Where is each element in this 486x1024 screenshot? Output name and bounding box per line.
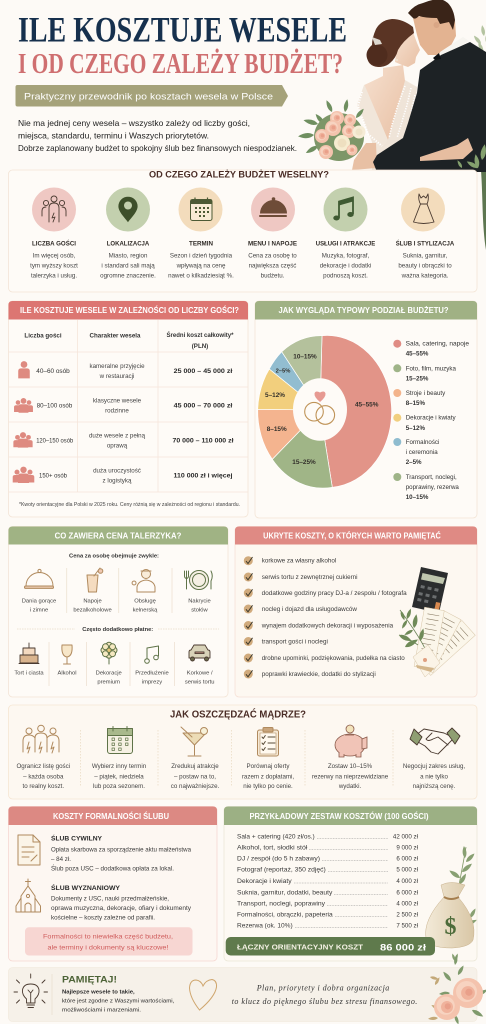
checklist: transport gości i noclegi — [262, 638, 328, 646]
chart value labels: 5–12% — [265, 392, 285, 399]
row: 120–150: 120–150 osób — [36, 438, 74, 445]
icon: heart outline — [190, 980, 217, 1010]
labels row 2: serwis tortu — [185, 680, 215, 686]
chart value labels: 8–15% — [267, 426, 287, 433]
civil ceremony text — [51, 834, 192, 872]
row: 150+ — [13, 467, 233, 485]
cost list: 6 000 zł — [396, 856, 419, 863]
cost list: Suknia, garnitur, dodatki, beauty — [237, 889, 333, 896]
header — [224, 806, 477, 825]
heading: od czego zależy: OD CZEGO ZALEŻY BUDŻET WESELNY? — [149, 170, 329, 180]
row: 150+: 110 000 zł i więcej — [174, 473, 233, 480]
callout — [25, 927, 192, 956]
labels row 1 — [22, 599, 211, 614]
header — [8, 526, 228, 544]
icon: calendar — [108, 726, 132, 754]
heading: PRZYKŁADOWY ZESTAW KOSZTÓW (100 GOŚCI) — [250, 812, 429, 821]
cost list: Dekoracje i kwiaty — [237, 878, 293, 885]
icon: clipboard — [258, 728, 278, 756]
cost list: Sala + catering (420 zł/os.) — [237, 833, 315, 840]
bouquet — [298, 99, 365, 155]
labels row 2: Korkowe / — [187, 671, 213, 677]
cost list: 5 000 zł — [396, 867, 419, 874]
labels row 2: imprezy — [142, 680, 162, 686]
labels row 2: Dekoracje — [96, 671, 122, 677]
labels row 1: i zimne — [30, 608, 48, 614]
closing quote — [232, 984, 417, 1006]
items labels: LICZBA GOŚCI — [32, 238, 76, 248]
legend — [393, 340, 470, 501]
items descriptions: tym wyższy koszt — [30, 263, 78, 270]
callout: ale terminy i dokumenty są kluczowe! — [48, 945, 169, 952]
cost list: 4 000 zł — [396, 878, 419, 885]
items labels: LOKALIZACJA — [107, 240, 150, 248]
religious ceremony text: Dokumenty z USC, nauki przedmałżeńskie, — [51, 896, 169, 903]
closing quote: Plan, priorytety i dobra organizacja — [256, 984, 389, 993]
items descriptions: wpływają na cenę — [176, 263, 226, 270]
tips text: Ogranicz listę gości — [16, 763, 70, 770]
panel: od czego zależy budżet — [8, 170, 477, 292]
groom neck and face — [413, 14, 456, 55]
cost list: Alkohol, tort, słodki stół — [237, 844, 308, 851]
religious ceremony text — [51, 883, 192, 921]
labels row 2: Tort i ciasta — [14, 671, 44, 677]
legend: poprawiny, rezerwa — [406, 484, 459, 491]
row: 120–150: duże wesele z pełną — [89, 433, 146, 440]
tips text: nie tylko po cenie. — [243, 783, 293, 790]
panel: budget split — [255, 301, 477, 518]
legend: 5–12% — [406, 425, 425, 432]
chart value labels: 45–55% — [355, 402, 379, 409]
remember text: PAMIĘTAJ! — [62, 975, 117, 986]
remember text: Najlepsze wesele to takie, — [62, 989, 135, 995]
tips text: najniższą cenę. — [413, 783, 456, 790]
cost list: 6 000 zł — [396, 889, 419, 896]
items descriptions: ogromne znaczenie. — [100, 273, 156, 280]
items labels — [32, 238, 455, 248]
icon: waiter — [132, 570, 155, 592]
row: 120–150 — [13, 432, 234, 450]
labels row 2: premium — [97, 680, 120, 686]
table column heads: (PLN) — [192, 343, 208, 350]
checklist: nocleg i dojazd dla usługodawców — [262, 606, 357, 613]
legend: Transport, noclegi, — [406, 474, 457, 481]
legend: i ceremonia — [406, 449, 438, 456]
row: 120–150: oprawą — [107, 443, 128, 450]
checklist: poprawki krawieckie, dodatki do stylizacji — [262, 671, 376, 678]
icon: heart and rings — [305, 391, 335, 424]
collar — [440, 37, 469, 56]
icon: guests — [32, 188, 76, 232]
icon: drink — [87, 568, 103, 592]
labels row 1: Nakrycie — [188, 599, 211, 605]
table column heads: Średni koszt całkowity* — [166, 332, 234, 339]
heading: CO ZAWIERA CENA TALERZYKA? — [55, 531, 182, 540]
icon: notes — [145, 646, 158, 663]
bride hair — [367, 19, 414, 67]
intro text — [18, 118, 297, 153]
cost list: DJ / zespół (do 5 h zabawy) — [237, 856, 320, 863]
labels row 1: kelnerską — [133, 608, 158, 614]
icon: cocktail — [181, 727, 208, 756]
row: 80–100: 80–100 osób — [37, 403, 73, 410]
cost list: 42 000 zł — [393, 833, 419, 840]
legend: Stroje i beauty — [406, 390, 446, 397]
bride face — [395, 32, 420, 67]
items descriptions: beauty i obrączki to — [398, 263, 452, 270]
heading: budget split: JAK WYGLĄDA TYPOWY PODZIAŁ BUDŻETU? — [278, 306, 449, 315]
dress lower — [357, 77, 420, 172]
closing quote: to klucz do pięknego ślubu bez stresu finansowego. — [232, 997, 417, 1006]
tips text: wydatki. — [338, 783, 361, 790]
civil ceremony text: Opłata skarbowa za sporządzenie aktu małżeństwa — [51, 846, 192, 853]
religious ceremony text: kościelne – koszty zależne od parafii. — [51, 914, 155, 921]
labels row 2 — [14, 671, 215, 686]
cost list: Fotograf (reportaż, 350 zdjęć) — [237, 867, 326, 874]
cost list: 2 500 zł — [396, 912, 419, 919]
panel: how to save — [8, 705, 477, 799]
heading: KOSZTY FORMALNOŚCI ŚLUBU — [53, 812, 169, 821]
chart value labels: 2–5% — [276, 369, 290, 375]
tips text: a nie tylko — [420, 773, 448, 780]
row: 150+: duża uroczystość — [93, 468, 141, 475]
icon: flower — [101, 642, 117, 664]
row: 40–60: 25 000 – 45 000 zł — [174, 368, 232, 375]
items descriptions: Suknia, garnitur, — [403, 253, 448, 260]
tips text: lub poza sezonem. — [93, 783, 145, 790]
photo: wedding couple with bouquet — [298, 0, 486, 250]
cost list — [237, 833, 419, 930]
icon: tableware — [184, 570, 212, 590]
religious ceremony text: oprawa muzyczna, dekoracje, ofiary i dokumenty — [51, 905, 192, 912]
checklist: korkowe za własny alkohol — [262, 558, 336, 565]
table column heads — [24, 332, 234, 350]
items labels: ŚLUB I STYLIZACJA — [396, 238, 455, 248]
items descriptions — [30, 253, 452, 280]
legend: 2–5% — [406, 459, 422, 466]
items descriptions: ważna kategoria. — [401, 273, 449, 280]
items descriptions: nawet o kilkadziesiąt %. — [168, 273, 234, 280]
intro text: Dobrze zaplanowany budżet to spokojny ślub bez finansowych niespodzianek. — [18, 143, 297, 153]
row: 120–150: 70 000 – 110 000 zł — [172, 438, 234, 445]
illustration: money bag with leaves — [426, 846, 478, 961]
row: 40–60: w restauracji — [99, 373, 134, 380]
items descriptions: Im więcej osób, — [33, 253, 76, 260]
heading: JAK OSZCZĘDZAĆ MĄDRZE? — [170, 708, 306, 720]
panel: sample cost set — [224, 806, 478, 961]
bride forearm — [420, 138, 473, 161]
tips text: Zredukuj atrakcje — [171, 763, 219, 770]
tips text: – postaw na to, — [174, 773, 216, 780]
groom hair — [408, 0, 455, 30]
bride arm and hand — [352, 143, 377, 170]
legend: Sala, catering, napoje — [406, 341, 470, 348]
items descriptions: Sezon i dzień tygodnia — [170, 253, 233, 260]
panel: cost table — [8, 301, 248, 517]
cost list: Rezerwa (ok. 10%) — [237, 923, 293, 930]
cost list: 7 500 zł — [396, 923, 419, 930]
tips text: rezerwy na nieprzewidziane — [312, 773, 389, 780]
items descriptions: talerzyka i usług. — [31, 273, 77, 280]
icon: calendar — [178, 188, 222, 232]
cost list: 4 000 zł — [396, 900, 419, 907]
row: 40–60: 40–60 osób — [36, 368, 70, 375]
icon: handshake — [410, 728, 460, 754]
total bar — [226, 937, 435, 956]
items labels: USŁUGI I ATRAKCJE — [316, 240, 375, 248]
chart value labels: 10–15% — [293, 353, 317, 360]
row: 80–100: 45 000 – 70 000 zł — [174, 403, 232, 410]
panel: co zawiera cena talerzyka — [8, 526, 228, 697]
tips text: Wybierz inny termin — [92, 763, 147, 770]
labels row 1: Obsługę — [134, 599, 156, 605]
panel: formalities costs — [8, 806, 217, 961]
row: 80–100 — [14, 398, 232, 415]
legend: 10–15% — [406, 494, 429, 501]
row: 40–60 — [18, 361, 232, 380]
table column heads: Liczba gości — [24, 333, 62, 340]
subheading: extra paid: Często dodatkowo płatne: — [82, 627, 153, 633]
subtitle ribbon — [16, 85, 288, 106]
legend: 8–15% — [406, 400, 425, 407]
jacket — [373, 42, 486, 172]
intro text: miejsca, standardu, terminu i Waszych priorytetów. — [18, 131, 209, 141]
chart value labels: 15–25% — [292, 459, 316, 466]
icon: piggy bank — [335, 725, 367, 757]
checklist: dodatkowe godziny pracy DJ-a / zespołu / fotografa — [262, 590, 407, 597]
items labels: TERMIN — [189, 240, 213, 248]
table column heads: Charakter wesela — [90, 333, 141, 340]
civil ceremony text: ŚLUB CYWILNY — [51, 834, 102, 843]
tips text: to realny koszt. — [22, 783, 64, 790]
tips text: Negocjuj zakres usług, — [403, 763, 465, 770]
cost list: 9 000 zł — [396, 844, 419, 851]
tips text — [16, 763, 465, 790]
title: ILE KOSZTUJE WESELE — [18, 10, 347, 50]
heading: UKRYTE KOSZTY, O KTÓRYCH WARTO PAMIĘTAĆ — [263, 531, 441, 540]
tips text: – piątek, niedziela — [94, 773, 144, 780]
items descriptions: największa część — [249, 263, 296, 270]
icon: light bulb — [14, 974, 48, 1008]
icon: church — [16, 879, 40, 912]
illustration: money bag with leaves: $ — [444, 914, 456, 940]
bare back — [364, 65, 405, 140]
tips text: razem z dopłatami, — [242, 773, 294, 780]
items descriptions: Cena za osobę to — [248, 253, 297, 260]
callout: Formalności to niewielka część budżetu, — [43, 934, 173, 941]
row: 40–60: kameralne przyjęcie — [89, 363, 145, 370]
labels row 2: Alkohol — [57, 671, 77, 677]
title: I OD CZEGO ZALEŻY BUDŻET? — [18, 47, 343, 80]
icon: dress — [401, 188, 445, 232]
icon: music note — [324, 188, 368, 232]
icon: location pin — [106, 188, 150, 232]
items labels: MENU I NAPOJE — [248, 240, 297, 248]
row: 150+: z logistyką — [103, 478, 132, 485]
legend: Formalności — [406, 439, 439, 446]
icon: wine — [62, 645, 72, 664]
items descriptions: Miasto, region — [109, 253, 148, 260]
row: 80–100: rodzinne — [105, 408, 129, 415]
icon: guests — [23, 725, 59, 753]
icon: document — [18, 835, 40, 865]
donut chart — [258, 335, 392, 488]
checklist: serwis tortu z zewnętrznej cukierni — [262, 574, 358, 581]
illustration: calculator, receipts, greenery — [398, 567, 475, 677]
labels row 1: Napoje — [83, 599, 102, 605]
lace — [383, 81, 417, 147]
header — [8, 806, 217, 825]
icon: cloche — [251, 188, 295, 232]
labels row 2: Przedłużenie — [135, 671, 169, 677]
title — [18, 10, 347, 80]
labels row 1: bezalkoholowe — [73, 608, 112, 614]
legend: Foto, film, muzyka — [406, 365, 456, 372]
labels row 1: Dania gorące — [22, 599, 56, 605]
subheading: included: Cena za osobę obejmuje zwykle: — [69, 554, 159, 560]
checklist: drobne upominki, podziękowania, pudełka na ciasto — [262, 655, 405, 662]
remember text: możliwościami i marzeniami. — [62, 1008, 141, 1014]
items descriptions: i standard sali mają — [101, 263, 155, 270]
legend: 15–25% — [406, 375, 429, 382]
chart value labels — [265, 353, 379, 466]
tips text: – każda osoba — [23, 773, 64, 780]
illustration: roses — [428, 955, 486, 1024]
table header — [8, 301, 248, 320]
remember text — [62, 975, 175, 1014]
civil ceremony text: – 84 zł. — [51, 856, 71, 863]
items descriptions: budżetu. — [261, 273, 285, 280]
subtitle ribbon: Praktyczny przewodnik po kosztach wesela w Polsce — [24, 92, 273, 102]
header — [255, 301, 477, 320]
religious ceremony text: ŚLUB WYZNANIOWY — [51, 883, 120, 892]
tips text: co najważniejsze. — [171, 783, 220, 790]
panel: hidden costs — [235, 526, 477, 697]
checklist — [244, 556, 407, 678]
header — [235, 526, 477, 544]
row: 80–100: klasyczne wesele — [93, 398, 142, 405]
remember text: które jest zgodne z Waszymi wartościami, — [62, 998, 175, 1004]
items descriptions: podnoszą koszt. — [323, 273, 368, 280]
cost list: Transport, noclegi, poprawiny — [237, 900, 326, 907]
footnote: *Kwoty orientacyjne dla Polski w 2025 roku. Ceny różnią się w zależności od regionu i standardu. — [19, 502, 240, 508]
heading: cost table: ILE KOSZTUJE WESELE W ZALEŻNOŚCI OD LICZBY GOŚCI? — [20, 306, 239, 315]
labels row 1: stołów — [191, 608, 209, 614]
icon: car — [189, 645, 210, 661]
legend: Dekoracje i kwiaty — [406, 415, 456, 422]
items descriptions: dekoracje i dodatki — [320, 263, 371, 270]
cost list: Formalności, obrączki, papeteria — [237, 912, 333, 919]
checklist: wynajem dodatkowych dekoracji i wyposażenia — [261, 622, 394, 630]
row: 150+: 150+ osób — [39, 473, 68, 480]
legend: 45–55% — [406, 351, 429, 358]
total bar: 86 000 zł — [380, 942, 426, 954]
intro text: Nie ma jednej ceny wesela – wszystko zależy od liczby gości, — [18, 118, 250, 128]
panel: remember — [8, 955, 486, 1024]
items descriptions: Muzyka, fotograf, — [322, 253, 370, 260]
tips text: Porównaj oferty — [246, 763, 290, 770]
icon: cloche — [24, 569, 54, 588]
tips text: Zostaw 10–15% — [328, 763, 373, 770]
total bar: ŁĄCZNY ORIENTACYJNY KOSZT — [237, 942, 364, 952]
icon: cake — [19, 643, 39, 664]
civil ceremony text: Ślub poza USC – dodatkowa opłata za lokal. — [51, 864, 174, 872]
